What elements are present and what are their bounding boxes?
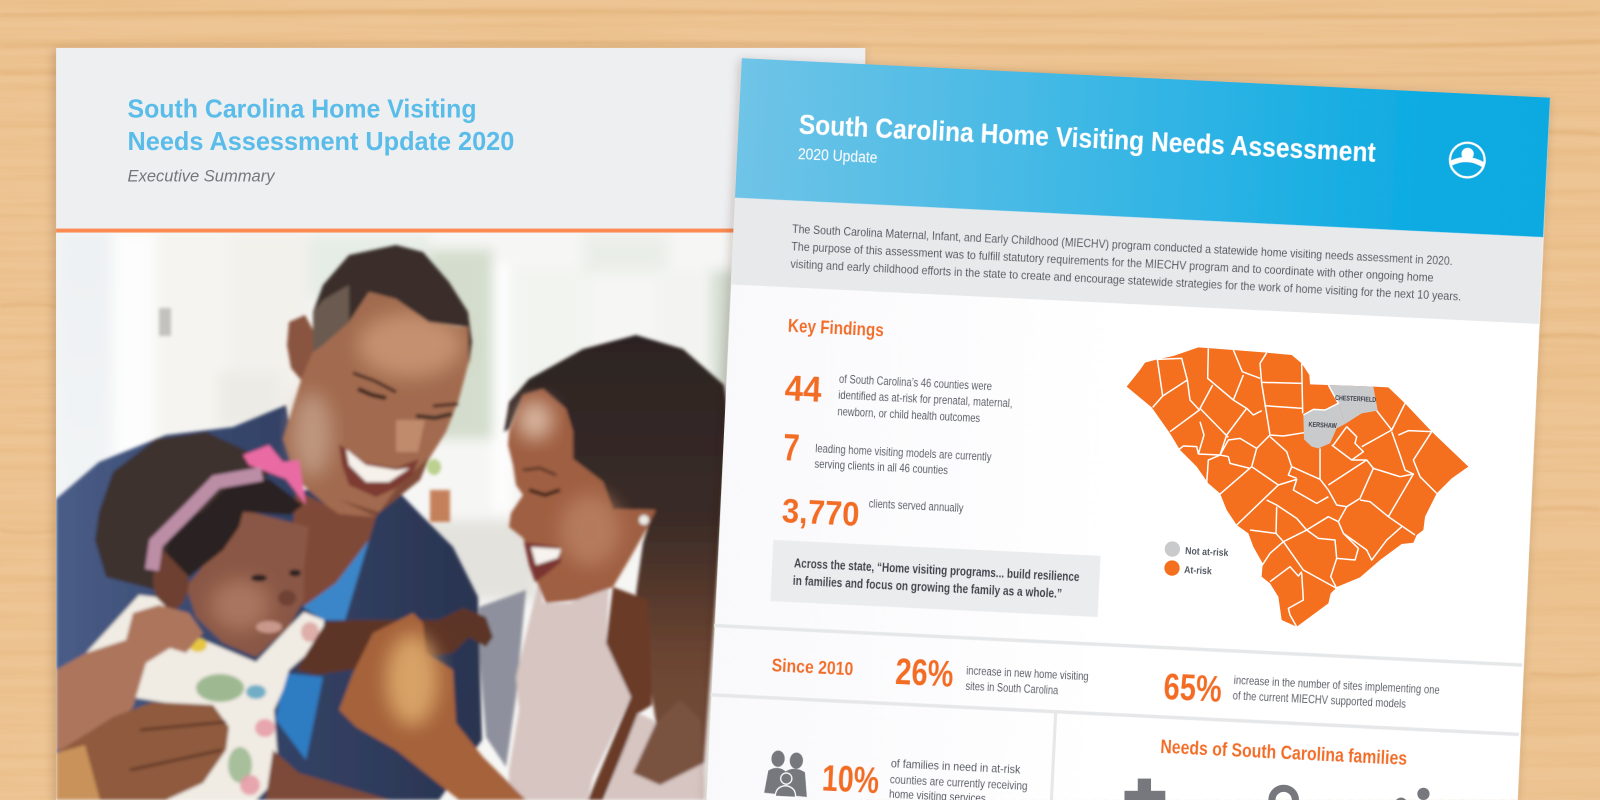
photo: baby's onesie	[86, 595, 324, 800]
callout: quote box	[770, 540, 1101, 617]
photo: baby's afro and bow	[95, 432, 306, 590]
panel: needs assessment infographic page	[706, 58, 1552, 800]
stat: 65 percent: of the current MIECHV supported models	[1232, 688, 1406, 711]
intro band	[731, 198, 1543, 324]
stat: 65 percent: increase in the number of sites implementing one	[1233, 673, 1440, 697]
legend	[1164, 541, 1229, 577]
stat: 10 percent: of families in need in at-risk	[891, 756, 1021, 777]
county label: Kershaw: KERSHAW	[1308, 422, 1337, 430]
stat: 44 counties: newborn, or child health outcomes	[837, 404, 980, 425]
intro band: The South Carolina Maternal, Infant, and Early Childhood (MIECHV) program conducted a statewide home visiting needs assessment in 2020.	[792, 222, 1453, 268]
panel: executive summary cover	[56, 48, 865, 800]
cover title: South Carolina Home Visiting	[128, 95, 477, 123]
orange rule	[56, 229, 865, 233]
header title: South Carolina Home Visiting Needs Assessment	[798, 108, 1377, 168]
stat: 3,770 clients: 3,770	[781, 492, 860, 534]
stat: 26 percent: increase in new home visiting	[966, 663, 1089, 683]
stat: 26 percent	[894, 651, 1090, 701]
cover subtitle: Executive Summary	[128, 167, 276, 186]
stat: 3,770 clients: clients served annually	[868, 496, 965, 515]
photo: woman's hair	[504, 335, 730, 787]
at-risk state shape	[1127, 347, 1468, 627]
photo: baby's arms	[56, 605, 493, 750]
county borders	[1153, 348, 1437, 627]
photo: woman's hand and forearm	[339, 613, 526, 800]
stat: 7 models: 7	[782, 426, 800, 469]
heading: key findings: Key Findings	[788, 315, 884, 340]
callout: quote box: in families and focus on growing the family as a whole.”	[793, 573, 1062, 601]
stat: 65 percent	[1163, 666, 1440, 720]
photo: family smiling with baby	[40, 220, 760, 800]
stat: 10 percent: counties are currently receiving	[890, 772, 1028, 793]
heading: since 2010: Since 2010	[771, 655, 854, 680]
stat: 65 percent: 65%	[1163, 666, 1223, 710]
stat: 44 counties: identified as at-risk for prenatal, maternal,	[838, 388, 1013, 411]
icon: person in circle	[1449, 142, 1485, 178]
cover title: Needs Assessment Update 2020	[128, 128, 514, 156]
stat: 26 percent: 26%	[894, 651, 955, 695]
photo: bright room background	[40, 220, 760, 800]
stat: 26 percent: sites in South Carolina	[965, 679, 1059, 697]
not at-risk counties	[1303, 385, 1378, 448]
photo: man's shirt	[56, 405, 482, 800]
intro band: visiting and early childhood efforts in the state to create and encourage statewide strategies for the work of home visiting for the next 10 years.	[790, 257, 1461, 304]
icon: family	[764, 750, 809, 798]
stat: 7 models: serving clients in all 46 counties	[814, 457, 948, 477]
stat: 44 counties: of South Carolina’s 46 counties were	[839, 372, 992, 393]
stat: 7 models	[782, 426, 993, 479]
legend: Not at-risk	[1185, 546, 1229, 559]
photo: sofa	[479, 590, 526, 767]
photo: woman's face	[508, 389, 656, 603]
map: South Carolina counties	[1127, 347, 1468, 627]
intro band: The purpose of this assessment was to fulfill statutory requirements for the MIECHV program and to coordinate with other ongoing home	[791, 239, 1434, 285]
stat: 7 models: leading home visiting models are currently	[815, 441, 993, 464]
cover title	[128, 95, 514, 156]
photo: man's hands	[56, 702, 390, 800]
heading: needs of families: Needs of South Carolina families	[1160, 736, 1408, 770]
stat: 10 percent	[821, 753, 1029, 800]
icons: needs row	[1124, 779, 1430, 800]
stat: 44 counties	[784, 368, 1014, 427]
stat: 3,770 clients	[781, 492, 965, 539]
photo: man's head	[283, 245, 472, 517]
header subtitle: 2020 Update	[797, 146, 878, 167]
blue header band	[735, 58, 1550, 237]
legend: At-risk	[1184, 565, 1212, 577]
photo: baby's head	[152, 474, 309, 657]
county label: Chesterfield: CHESTERFIELD	[1335, 395, 1376, 404]
photo: woman's blouse	[508, 580, 704, 800]
callout: quote box: Across the state, “Home visiting programs... build resilience	[794, 555, 1080, 584]
stat: 44 counties: 44	[784, 368, 823, 410]
